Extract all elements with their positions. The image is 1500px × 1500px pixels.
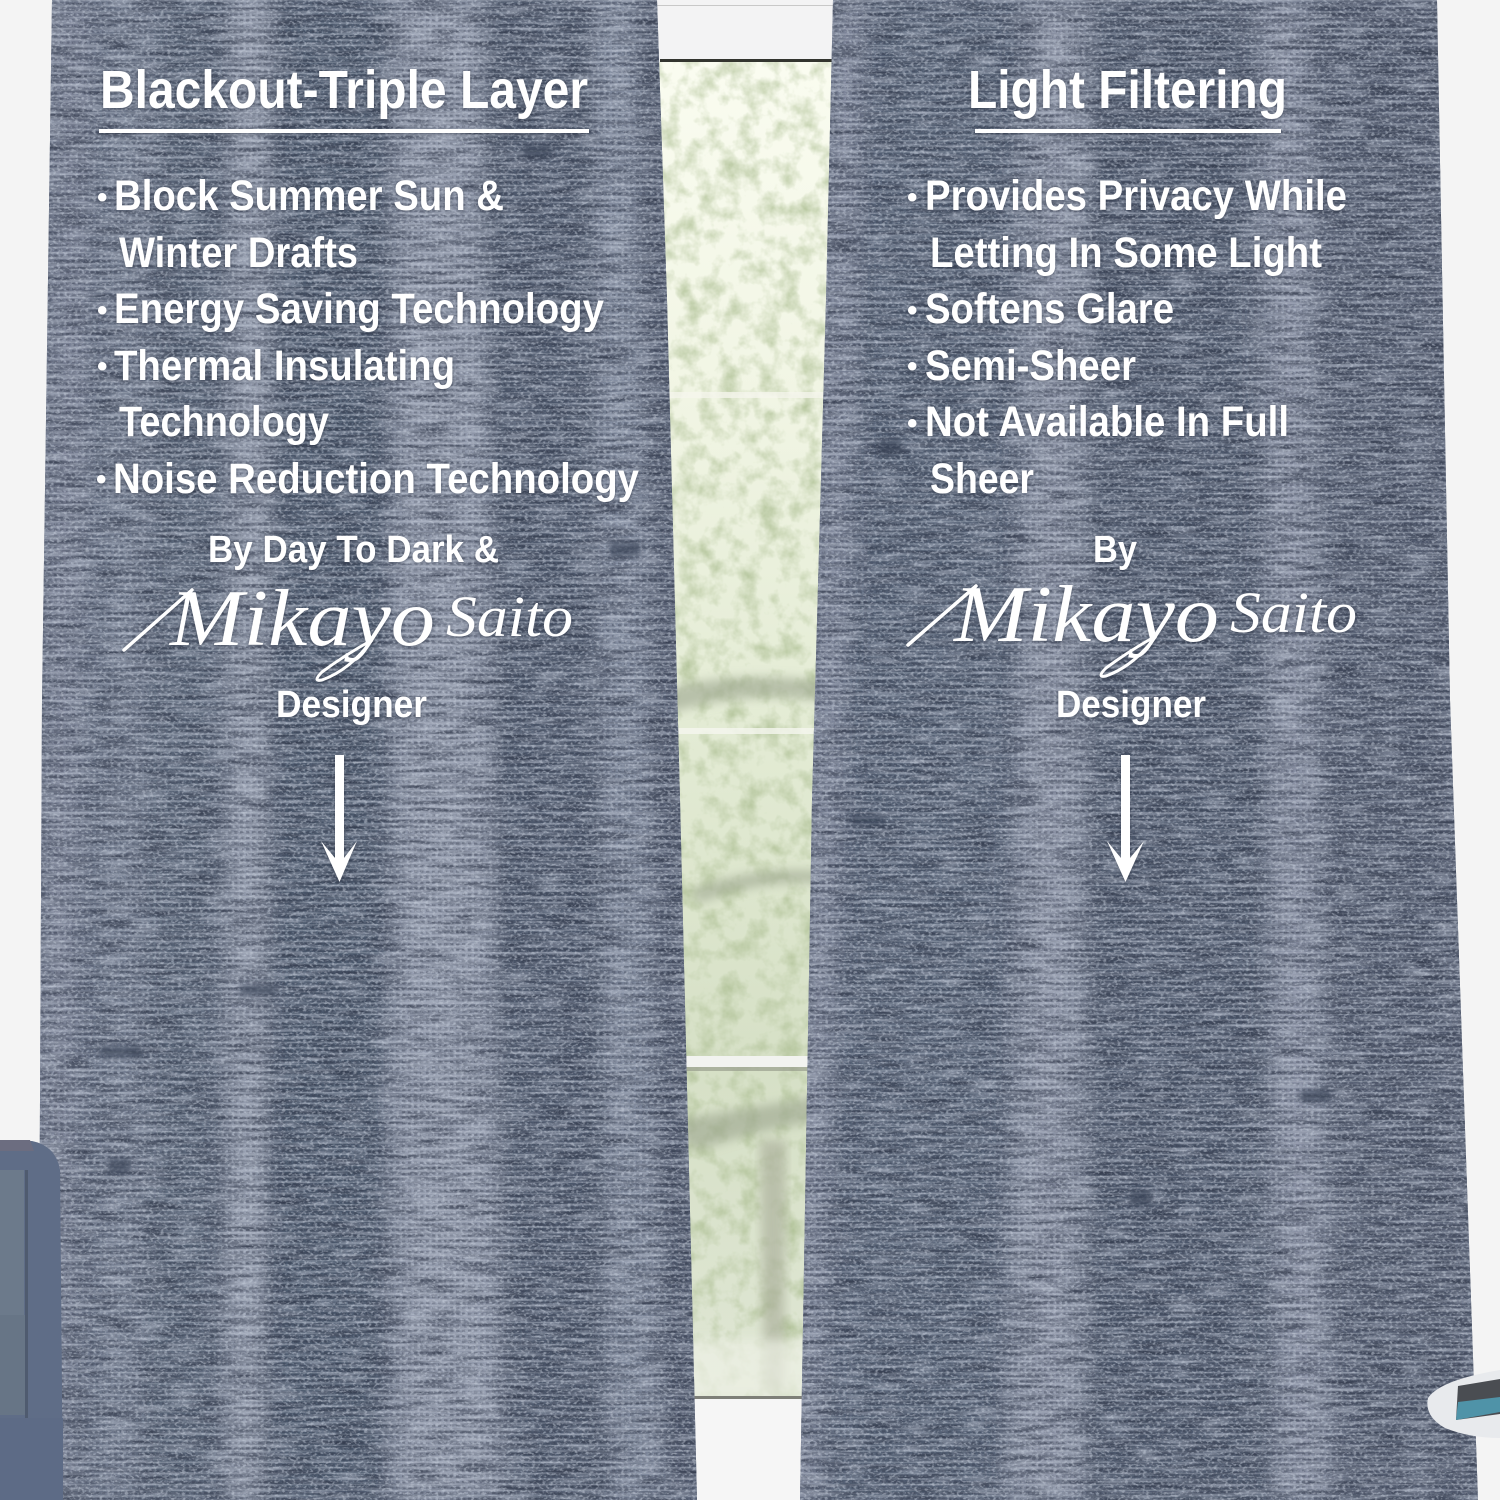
credit line: By Day To Dark &: By Day To Dark & <box>208 529 499 571</box>
text block: blackout column <box>96 60 639 882</box>
feature list: light filtering: Letting In Some Light <box>930 229 1322 277</box>
feature list: blackout: • <box>97 181 108 214</box>
feature list: light filtering: Provides Privacy While <box>925 172 1347 220</box>
feature list: light filtering: • <box>907 294 918 327</box>
credit line: By: By <box>1093 529 1137 571</box>
heading: Blackout-Triple Layer: Blackout-Triple Layer <box>100 60 588 120</box>
feature list: light filtering: • <box>907 350 918 383</box>
signature: Mikayo Saito <box>124 575 573 680</box>
signature: Mikayo Saito: Mikayo <box>169 575 435 663</box>
feature list: light filtering: • <box>907 181 918 214</box>
feature list: blackout: • <box>97 294 108 327</box>
feature list: light filtering: Softens Glare <box>925 285 1174 333</box>
label: Designer: Designer <box>1056 684 1206 726</box>
feature list: blackout: Block Summer Sun & <box>114 172 504 220</box>
feature list: light filtering: • <box>907 407 918 440</box>
signature: Mikayo Saito <box>908 571 1357 676</box>
feature list: light filtering: Semi-Sheer <box>925 342 1136 390</box>
signature: Mikayo Saito: Saito <box>446 584 573 649</box>
heading underline <box>99 129 589 133</box>
icon: armchair <box>0 1140 63 1500</box>
heading underline <box>975 129 1281 133</box>
label: Designer: Designer <box>276 684 427 726</box>
feature list: blackout <box>96 172 639 503</box>
text block: light filtering column <box>907 60 1357 882</box>
feature list: blackout: • <box>97 350 108 383</box>
feature list: blackout: Noise Reduction Technology <box>113 455 639 503</box>
arrow: down <box>1107 755 1144 882</box>
panel: left curtain <box>30 0 710 1500</box>
feature list: blackout: Energy Saving Technology <box>114 285 604 333</box>
heading: Light Filtering: Light Filtering <box>968 60 1287 120</box>
feature list: blackout: • <box>96 463 107 496</box>
feature list: blackout: Technology <box>119 398 329 446</box>
signature: Mikayo Saito: Mikayo <box>953 571 1219 659</box>
icon: side table with book <box>1427 1370 1500 1438</box>
window with trees <box>657 5 833 1399</box>
feature list: blackout: Winter Drafts <box>119 229 358 277</box>
signature: Mikayo Saito: Saito <box>1230 580 1357 645</box>
arrow: down <box>321 755 357 882</box>
panel: right curtain <box>790 0 1490 1500</box>
feature list: light filtering <box>907 172 1347 503</box>
feature list: blackout: Thermal Insulating <box>114 342 455 390</box>
feature list: light filtering: Not Available In Full <box>925 398 1289 446</box>
feature list: light filtering: Sheer <box>930 455 1034 503</box>
